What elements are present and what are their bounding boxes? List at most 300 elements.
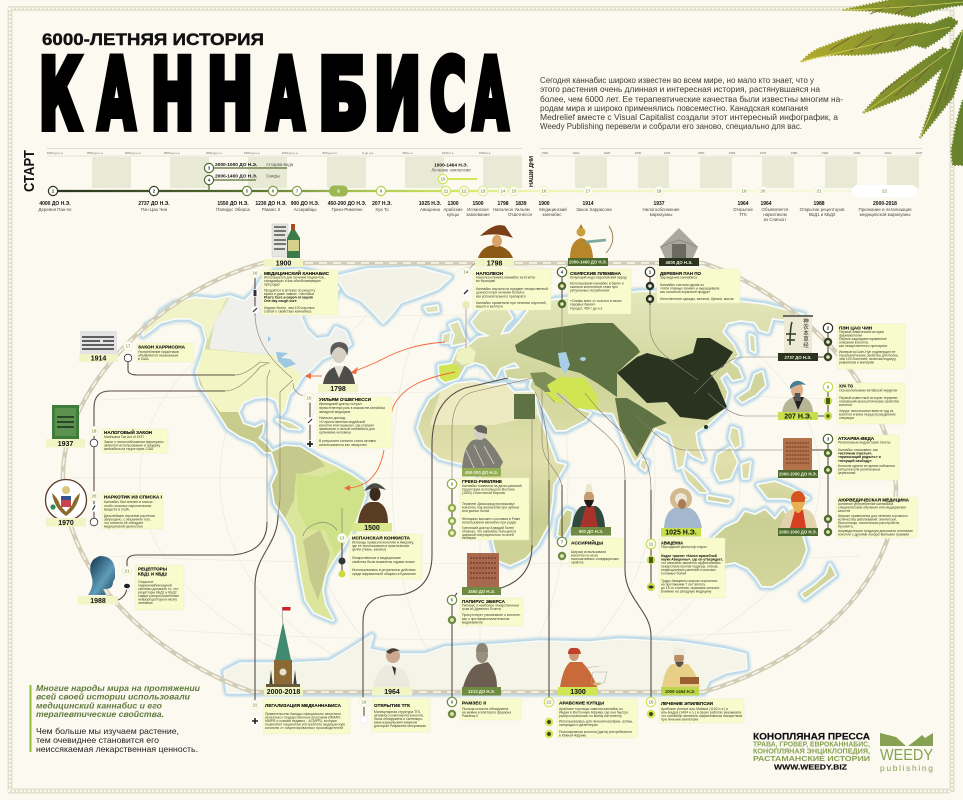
panel: 17 Harrison act 1914: [79, 331, 194, 363]
timeline captions: 900 ДО Н.Э.: [291, 201, 320, 207]
card: РАМЗЕС II: [462, 700, 486, 706]
card: особо опасных наркотических: [104, 504, 152, 508]
upper range labels: Скифы: [266, 174, 280, 178]
card: ритуальных погребениях: [570, 288, 610, 292]
timeline captions: КБД1 и КБД2: [809, 212, 836, 217]
card: как основной кормовой продукт: [660, 290, 710, 294]
icons and node: 3: [827, 437, 830, 442]
card: Персидский философ и врач: [661, 545, 707, 549]
card: Использовали каннабис в банях и: [570, 282, 624, 286]
date label: 450-200 ДО Н.Э.: [465, 470, 498, 475]
card: Piso's Cure и сироп от кашля: [264, 296, 313, 300]
card: Каннабис был внесен в список: [104, 500, 153, 504]
timeline captions: Открытие рецепторов: [800, 207, 845, 212]
card: страдающих и как обезболивающее: [264, 279, 321, 283]
card: [836, 497, 917, 538]
card: Первый известный истории терапевт,: [839, 396, 898, 400]
callout: closing note: Многие народы мира на протяжении: [36, 683, 201, 693]
south america: [272, 446, 365, 620]
axis labels: 2010: [885, 151, 892, 155]
card: при лечении эпилепсии: [661, 718, 698, 722]
card: Первое задокументированное: [839, 337, 887, 341]
icon: Peace Tower: [266, 607, 300, 687]
timeline captions: завоевание: [466, 212, 490, 217]
card: [460, 598, 523, 626]
card: запрещено, с указанием того,: [104, 518, 151, 522]
card: Психоактивная конопля (дагга) употребляется: [559, 730, 632, 734]
axis labels: 1500 до н.э.: [244, 151, 260, 155]
main title: А: [98, 39, 135, 151]
card: ценности при лечении болей и: [476, 291, 525, 295]
card: операции: [839, 416, 854, 420]
card: Греческий доктор Клавдий Гален: [462, 526, 514, 530]
callout: closing note: тем очевиднее становится его: [36, 735, 159, 745]
card: статей о свойствах каннабиса: [264, 310, 311, 314]
card: науки Авиценны», где он утверждает,: [661, 558, 723, 562]
caspian and aral: [558, 352, 570, 374]
card: [557, 699, 637, 738]
icons and node: 1: [649, 270, 652, 275]
callout: closing note: [30, 683, 201, 754]
axis labels: 1910: [573, 151, 580, 155]
card: как лекарственного препарата: [839, 344, 887, 348]
date label: 1550 ДО Н.Э.: [468, 589, 495, 594]
axis labels: 500 до н.э.: [323, 151, 338, 155]
card: несколько государственных программ (MMAR,: [265, 716, 341, 720]
card: головных болей: [661, 572, 686, 576]
credit block: КОНОПЛЯНАЯ ПРЕССА: [753, 732, 870, 742]
card: Папирус о наиболее лекарственных: [462, 604, 519, 608]
axis labels: 1500 н.э.: [479, 151, 491, 155]
card: Аюрведическая традиция допускала сочетание: [838, 529, 913, 533]
card: широкой популярностью по всей: [462, 533, 514, 537]
timeline captions: 450-200 ДО Н.Э.: [328, 201, 367, 207]
date label: 2000-1000 ДО Н.Э.: [779, 472, 817, 477]
panel: 12 Arab merchants: [544, 648, 637, 738]
card: Marihuana Tax Act of 1937: [104, 435, 144, 439]
panel: 1 Pan Po village: [645, 228, 740, 303]
panel: 4 Scythians: [557, 224, 631, 314]
egypt: [514, 394, 535, 419]
card: позволяют пациентам употреблять медицинскую: [265, 722, 345, 726]
timeline captions: 1914: [582, 201, 594, 207]
callout: closing note: медицинский каннабис и его: [36, 700, 162, 710]
antarctica: [225, 636, 746, 692]
card: [569, 538, 623, 567]
card: [568, 269, 631, 314]
card: Использовалась для лечения малярии, астмы,: [559, 720, 633, 724]
card: целях (ткань, канаты): [352, 548, 386, 552]
upper range labels: Лечение эпилепсии: [431, 168, 471, 172]
panel: 2 Pen Tsao Ching: [778, 315, 905, 369]
panel: 16 medical cannabis 1900: [250, 224, 338, 315]
card: НАПОЛЕОН: [476, 271, 503, 276]
card: [659, 699, 744, 723]
date label: 1970: [58, 520, 74, 527]
timeline captions: из Списка I: [764, 217, 786, 222]
card: на протяжении 7 лет вплоть: [661, 582, 705, 586]
card: рецепторы КБД1 и КБД2: [138, 590, 177, 594]
card: ревматизм и малярию: [839, 360, 875, 364]
card: Испанцы привезли коноплю в Америку,: [352, 540, 414, 544]
timeline captions: Хуа То: [375, 207, 389, 212]
timeline captions: каннабис: [543, 212, 562, 217]
icons and node: 4: [561, 270, 564, 275]
axis labels: 500 н.э.: [403, 151, 414, 155]
card: «приносящий радость» и: [838, 455, 881, 459]
timeline: [22, 149, 923, 222]
card: НАЛОГОВЫЙ ЗАКОН: [104, 428, 152, 435]
card: [350, 534, 422, 579]
card: Употребление наркотиков: [138, 350, 179, 354]
card: ПАПИРУС ЭБЕРСА: [462, 599, 506, 604]
card: влияние на западную медицину: [661, 590, 712, 594]
card: Издано более, чем 100 научных: [264, 306, 315, 310]
timeline nodes: 5: [246, 189, 249, 194]
axis labels: 1940: [664, 151, 671, 155]
icons: [824, 515, 832, 536]
timeline nodes: 17: [586, 189, 591, 194]
timeline captions: Арабские: [443, 207, 463, 212]
icon: tincture bottle and advert: [272, 224, 300, 258]
card: В результате конопля стала активно: [319, 439, 376, 443]
icons and node: 15: [307, 396, 312, 401]
axis labels: 4000 до н.э.: [47, 151, 63, 155]
globe dashed frame: [63, 263, 896, 692]
card: [659, 538, 725, 598]
card: трав из Древнего Египта: [462, 607, 501, 611]
timeline captions: О'Шегнесси: [508, 212, 533, 217]
card: Используется для лечения пациентов,: [264, 276, 325, 280]
card: МЕДИЦИНСКИЙ КАННАБИС: [264, 269, 330, 276]
icon: herbal scroll: 神: [803, 317, 809, 325]
card: Открытие: [138, 580, 153, 584]
timeline nodes: 12: [462, 189, 467, 194]
card: паровых банях»: [570, 302, 596, 306]
icon: Ayurveda portrait: [780, 491, 817, 528]
card: бронхита.: [838, 524, 854, 528]
card: фармакологии: [839, 334, 862, 338]
card: Рамзеса II: [462, 714, 478, 718]
upper range labels: [215, 162, 471, 180]
timeline captions: 1839: [515, 201, 527, 207]
upper range labels: 1000-1464 Н.Э.: [434, 162, 468, 168]
main title: Н: [151, 39, 194, 151]
axis labels: 2000 до н.э.: [206, 151, 222, 155]
card: Широко использовали: [571, 550, 606, 554]
callout: closing note: неиссякаемая лекарственная ценность.: [36, 744, 198, 754]
axis labels: 3500 до н.э.: [87, 151, 103, 155]
card: каннабиса на территории США.: [104, 447, 154, 451]
panel: 9 Hua Tuo: [778, 381, 905, 424]
icon: cannabis leaf: [801, 0, 963, 165]
icons and node: 16: [253, 271, 258, 276]
date label: 1988: [90, 598, 106, 605]
timeline captions: 1550 ДО Н.Э.: [217, 201, 249, 207]
orange migration arrows: [305, 342, 455, 491]
card: Религиозные индуистские тексты: [838, 440, 891, 444]
timeline nodes: 20: [761, 189, 766, 194]
card: нейрорецепторы в мозгу: [138, 598, 177, 602]
card: Закон о налогообложении марихуаны: [104, 440, 164, 444]
stripes: [92, 157, 919, 188]
card: что конопля не обладает: [104, 521, 144, 525]
card: АЮРВЕДИЧЕСКАЯ МЕДИЦИНА: [838, 498, 910, 502]
card: использовали каннабис при родах: [462, 520, 517, 524]
axis labels: 1950: [698, 151, 705, 155]
intro text: более, чем 6000 лет. Ее терапевтические качества были известны многим на-: [540, 94, 843, 104]
panel: 5 Ebers papyrus: [447, 553, 523, 626]
card: (1500) с Восточной Европы: [462, 491, 506, 495]
icon: Avicenna portrait: [664, 488, 702, 528]
card: «пяти главных семян» и выращивали,: [660, 286, 720, 290]
card: медикаменте: [462, 621, 483, 625]
icons and node: 9: [827, 385, 830, 390]
icon: scientist portrait: [373, 648, 410, 687]
card: инфекционных ранений и сильных: [661, 568, 716, 572]
card: описавший анальгетические свойства: [839, 400, 899, 404]
timeline captions: Рамзес II: [262, 207, 280, 212]
icon: green stamp: [52, 405, 79, 439]
card: УИЛЬЯМ О'ШЕГНЕССИ: [319, 397, 371, 402]
date label: 1025 Н.Э.: [665, 530, 697, 537]
card: на мумии египетского фараона: [462, 711, 511, 715]
card: Каннабис считали одним из: [660, 283, 704, 287]
card: Арабские торговцы завезли каннабис из: [559, 707, 623, 711]
timeline captions: Папирус Эберса: [216, 207, 250, 212]
card: психоактивных и медицинских: [571, 557, 619, 561]
card: Каннабис появился на диско-римской: [462, 484, 522, 488]
card: Ирландский доктор сыграл: [319, 402, 362, 406]
timeline nodes: 10: [441, 177, 446, 182]
intro text: родам мира и широко применялись повсеместно. Канадская компания: [540, 103, 808, 113]
panel: 14 Napoleon 1798: [462, 225, 551, 310]
spain: [439, 364, 460, 382]
card: специалистами обучения или медицинских: [838, 506, 906, 510]
card: АССИРИЙЦЫ: [571, 538, 604, 546]
axis labels: 1900: [542, 151, 549, 155]
sahara: [430, 382, 538, 425]
icon: Arab merchant: [560, 648, 607, 687]
panel: 13 Spanish conquest 1500: [338, 483, 422, 579]
graticule: [70, 264, 890, 692]
date label: 1300: [570, 689, 586, 696]
icon: head scan: [88, 556, 115, 595]
icon: Napoleon portrait: [478, 225, 513, 258]
card: Изготовление одежды, канатов, бумаги, масла: [660, 297, 734, 301]
timeline captions: 1988: [813, 201, 825, 207]
icons and node: 2: [827, 326, 830, 331]
card: распространилась по всему континенту: [559, 714, 622, 718]
panel: 3 Atharva Veda: [778, 434, 899, 480]
card: сжигали конопляное семя при: [570, 285, 618, 289]
connector lines: [94, 262, 828, 720]
main title: С: [430, 39, 466, 151]
icon: engraved portrait: [323, 342, 355, 384]
card: ЗАКОН ХАРРИСОНА: [138, 344, 186, 350]
card: Зарождение каннабиса: [660, 276, 697, 280]
card: в США.: [138, 357, 150, 361]
timeline nodes: [48, 163, 917, 197]
panel: 15 O'Shaughnessy 1798: [304, 342, 392, 448]
icon: Greek engraving: [462, 425, 503, 468]
timeline captions: наркотиком: [763, 212, 787, 217]
callout: closing note: всей своей истории использовали: [36, 692, 191, 702]
card: Каннабис изучали на предмет лекарственной: [476, 287, 548, 291]
card: Издал трактат «Канон врачебной: [661, 554, 717, 558]
timeline captions: 1300: [447, 201, 459, 207]
timeline bar: [53, 190, 885, 192]
icons and node: 14: [464, 270, 469, 275]
card: Пыльца конопли обнаружена: [462, 707, 508, 711]
timeline captions: Пэн Цао Чин: [141, 207, 168, 212]
card: Геродот, 450 г до н.э.: [570, 306, 603, 310]
card: One day cough cure: [264, 299, 297, 303]
icon: herbal scroll: 经: [803, 341, 809, 349]
card: [135, 565, 184, 610]
upper range labels: 2000-1000 ДО Н.Э.: [215, 162, 257, 168]
date label: 207 Н.Э.: [784, 414, 812, 421]
card: [372, 699, 430, 732]
card: [657, 269, 740, 303]
timeline captions: Медицинский: [539, 207, 567, 212]
timeline captions: Испанское: [467, 207, 489, 212]
card: Лекарственные и медицинские: [352, 556, 401, 560]
timeline nodes: 18: [657, 189, 662, 194]
card: «Скифы воют от счастья в своих: [570, 299, 622, 303]
icons and node: 18: [92, 429, 97, 434]
card: ЛЕГАЛИЗАЦИЯ МЕДКАННАБИСА: [265, 703, 342, 708]
alaska: [143, 297, 227, 340]
card: организма человека: [319, 430, 351, 434]
usa: [197, 349, 302, 414]
timeline nodes: 15: [512, 189, 517, 194]
timeline captions: 2000-2018: [873, 201, 897, 207]
card: при родах: [264, 282, 280, 286]
timeline nodes: 14: [501, 189, 506, 194]
timeline captions: 1798: [497, 201, 509, 207]
axis labels: 1930: [635, 151, 642, 155]
card: ЛЕЧЕНИЕ ЭПИЛЕПСИИ: [661, 701, 713, 706]
panel: 6 Ramses II: [447, 643, 521, 720]
card: как о противовоспалительном: [462, 617, 510, 621]
card: запретил использование и продажу: [104, 444, 160, 448]
date label: 4000 ДО Н.Э.: [666, 260, 692, 265]
icons and node: 13: [340, 536, 345, 541]
card: что каннабис является эффективным: [661, 561, 721, 565]
card: человека: [138, 601, 153, 605]
card: использоваться как лекарство: [319, 443, 367, 447]
card: Каннабис применяли при лечении опухолей,: [476, 301, 547, 305]
card: коноплю, как анальгетик при зубных: [462, 506, 520, 510]
axis labels: 1960: [729, 151, 736, 155]
card: [837, 383, 905, 424]
card: MMPR и совсем недавно - ACMPR), которые: [265, 719, 337, 723]
date label: 1213 ДО Н.Э.: [468, 689, 495, 694]
mexico: [208, 396, 272, 452]
card: ХУА ТО: [839, 384, 853, 388]
card: активного компонента конопли,: [374, 714, 424, 718]
card: терапевтические свойства для более,: [839, 354, 899, 358]
card: «О приготовлении индийской: [319, 420, 365, 424]
icons and node: 12: [547, 700, 552, 705]
card: Император Шэн-Нун подтвердил ее: [839, 350, 896, 354]
date label: 1798: [487, 261, 502, 268]
timeline nodes: 8: [337, 189, 340, 194]
card: во Францию: [476, 279, 496, 283]
timeline captions: 1500: [472, 201, 484, 207]
panel: 22 legalization 2000-2018: [250, 607, 350, 734]
date label: 2000-1000 ДО Н.Э.: [779, 530, 817, 535]
timeline captions: марихуаны: [650, 212, 672, 217]
icons and node: 10: [649, 700, 654, 705]
timeline nodes: 21: [817, 189, 822, 194]
timeline nodes: 4: [208, 178, 211, 183]
timeline captions: медицинской марихуаны: [860, 212, 910, 217]
date label: 2000-2018: [267, 689, 300, 696]
icons and node: 21: [125, 569, 130, 574]
timeline nodes: 19: [742, 189, 747, 194]
timeline captions: Авиценна: [420, 207, 441, 212]
greenland: [337, 268, 450, 322]
date label: 1937: [58, 441, 73, 448]
card: Каннабис описывают, как: [838, 448, 878, 452]
recent era label: НАШИ ДНИ: [529, 156, 535, 187]
card: бессонницы, психических расстройств,: [838, 521, 900, 525]
timeline captions: Признание и легализация: [859, 207, 912, 212]
card: чем 100 болезней, включая подагру,: [839, 357, 896, 361]
canada: [210, 270, 350, 376]
icon: herbal scroll: 农: [803, 323, 809, 331]
date label: 2000-1400 ДО Н.Э.: [569, 260, 607, 264]
date label: 1900: [276, 261, 291, 268]
card: ОТКРЫТИЕ ТГК: [374, 703, 410, 708]
iran: [547, 377, 597, 410]
icon: herbal scroll: 草: [803, 335, 809, 343]
icon: hut: [660, 228, 698, 258]
timeline captions: ТГК: [739, 212, 747, 217]
timeline nodes: 22: [882, 189, 887, 194]
icon: conquistador: [358, 483, 388, 523]
card: Женщины высшего сословия в Риме: [462, 517, 520, 521]
timeline captions: [39, 201, 912, 222]
card: системы доказало то, что: [138, 587, 179, 591]
card: качеств: [838, 509, 850, 513]
icon: Assyrian portrait: [572, 484, 605, 527]
timeline captions: 1025 Н.Э.: [419, 201, 442, 207]
card: кашля и желтухи: [476, 304, 503, 308]
great lakes: [268, 336, 296, 368]
card: Хирург использовал вместе суд из: [839, 409, 894, 413]
card: количества заболеваний: эпилепсии,: [838, 518, 897, 522]
card: доктором Рафаэлем Мехуламом: [374, 724, 426, 728]
intro text: Сегодня каннабис широко известен во всем мире, но мало кто знает, что у: [540, 75, 815, 85]
timeline start label: СТАРТ: [22, 150, 38, 192]
card: аль-Бадри (1464 н.э.) в своих работах указывали,: [661, 711, 742, 715]
card: [460, 699, 521, 720]
title: [39, 30, 508, 151]
timeline nodes: 9: [380, 189, 383, 194]
card: АВИЦЕННА: [661, 540, 684, 546]
card: конопли и вина перед проведением: [839, 412, 896, 416]
panel: 20 schedule I 1970: [46, 480, 163, 529]
card: Широко применялся для лечения огромного: [838, 514, 908, 518]
card: АРАБСКИЕ КУПЦЫ: [559, 700, 605, 706]
card: где ее использовали в практических: [352, 544, 409, 548]
axis labels: 1000 до н.э.: [282, 151, 298, 155]
india: [615, 398, 667, 457]
date label: 1500: [364, 525, 380, 532]
